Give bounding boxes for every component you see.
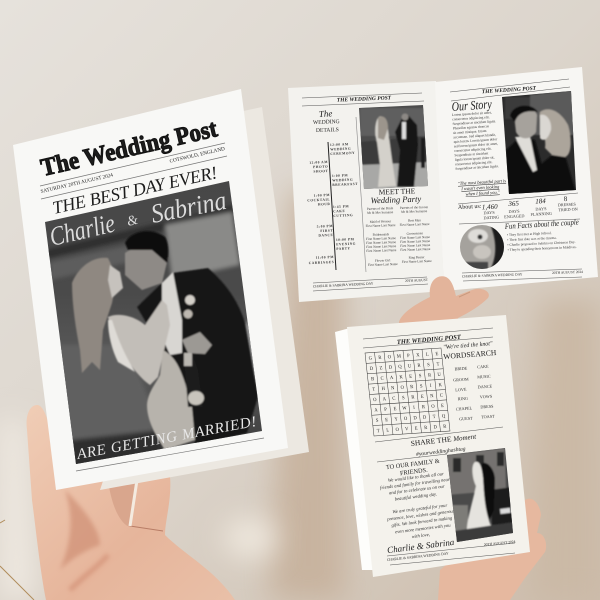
right page footer: [462, 269, 583, 281]
thank you message: [380, 458, 455, 555]
timeline: CUTTING: [333, 213, 353, 218]
timeline: 1:00 PM: [332, 173, 348, 178]
photo of couple: [45, 181, 262, 464]
meet the wedding party: Ring Bearer: [408, 255, 426, 260]
left page header: [302, 93, 424, 106]
timeline: 1:45 PM: [333, 204, 349, 209]
wedding details heading: [313, 108, 340, 134]
left page header: THE WEDDING POST: [337, 95, 392, 104]
stats row: About us:: [458, 204, 482, 211]
story text: [452, 110, 500, 171]
left page: [288, 81, 444, 302]
story text: consectetur adipiscing elit.: [455, 160, 493, 166]
timeline: 12:00 AM: [309, 160, 328, 165]
right page footer: 20TH AUGUST 2024: [552, 270, 583, 275]
right page header: THE WEDDING POST: [482, 86, 537, 95]
hand holding front card: [27, 405, 235, 600]
timeline: SHOOT: [313, 169, 329, 174]
meet the wedding party: Flower Girl: [375, 258, 391, 263]
thank you message: Charlie & Sabrina: [387, 537, 455, 555]
meet the wedding party: First Name Last Name: [400, 235, 430, 240]
thank you message: FRIENDS.: [400, 467, 428, 477]
timeline: CAKE: [333, 209, 346, 213]
timeline: PHOTO: [313, 164, 328, 169]
meet the wedding party: First Name Last Name: [399, 222, 430, 227]
word list: MUSIC: [477, 374, 491, 379]
story text: sit amet tristique. Etiam: [453, 129, 487, 135]
word list: BRIDE: [454, 366, 468, 371]
stats row: DAYS: [535, 206, 547, 212]
story text: consectetur adipiscing elit.: [452, 115, 490, 121]
champagne bottle: [186, 385, 193, 408]
word search grid: [365, 348, 450, 436]
thank you message: We would like to thank all our: [388, 472, 444, 484]
timeline: 12:00 AM: [330, 142, 349, 147]
word list: RING: [458, 396, 468, 401]
right page footer: CHARLIE & SABRINA WEDDING DAY: [462, 272, 523, 278]
stats row: DAYS: [483, 210, 495, 215]
stats row: ENGAGED: [504, 213, 525, 219]
groom suit: [137, 268, 258, 445]
timeline: 5:00 PM: [317, 224, 333, 229]
story text: quis lorem. Lorem ipsum dolor: [454, 137, 498, 144]
story text: consectetur adipiscing elit.: [454, 147, 492, 153]
share the moment: [375, 427, 503, 462]
timeline: PARTY: [336, 246, 351, 251]
thank you message: gifts. We look forward to making: [391, 516, 453, 529]
footer: CHARLIE & SABRINA WEDDING DAY: [387, 551, 449, 562]
meet the wedding party: First Name Last Name: [366, 240, 397, 245]
footer: [387, 540, 516, 565]
timeline: WEDDING: [332, 178, 353, 182]
thank you message: TO OUR FAMILY &: [386, 458, 440, 471]
script names: Charlie: [47, 208, 118, 252]
word list: TOAST: [481, 414, 495, 419]
bride dress drape: [108, 320, 135, 372]
left page footer: [313, 277, 429, 291]
meet the wedding party: Mr & Mrs Surname: [401, 209, 428, 214]
column divider: [356, 117, 366, 272]
share the moment: #yourweddinghashtag: [416, 446, 466, 458]
fun facts list: • Charlie proposed to Sabrina on Christmas Day.: [507, 240, 576, 247]
footer: 20TH AUGUST 2024: [484, 540, 516, 547]
bride skirt: [147, 350, 195, 450]
timeline: HOUR: [318, 202, 330, 207]
hand gripping booklet: top: [399, 276, 489, 330]
bride face: [108, 265, 123, 298]
meet the wedding party: First Name Last Name: [366, 244, 397, 249]
word list: CAKE: [477, 364, 489, 369]
thank you message: We are truly grateful for your: [392, 504, 448, 515]
pull quote: "The most beautiful part is: [458, 178, 506, 186]
front card: [13, 89, 288, 490]
fun facts list: [507, 230, 577, 252]
header: [363, 328, 493, 348]
circular pet photo: [460, 225, 504, 269]
date line: SATURDAY 20TH AUGUST 2024: [40, 172, 114, 195]
story text: Suspendisse at tincidunt ligula.: [455, 164, 499, 171]
word list: GUEST: [459, 416, 473, 421]
thank you message: and far to celebrate us on our: [389, 485, 445, 496]
thank you message: with love,: [412, 533, 430, 540]
fun facts list: • They first met at High School.: [507, 231, 552, 237]
open booklet: [288, 67, 598, 302]
bottom rule: [76, 438, 264, 471]
timeline: EVENING: [336, 242, 356, 246]
timeline: WEDDING: [330, 147, 351, 151]
word search heading: WORDSEARCH: [443, 348, 497, 361]
meet the wedding party: Bridesmaids: [373, 232, 390, 237]
word list: LOVE: [455, 387, 467, 392]
stats row: 365: [507, 199, 520, 208]
closing headline: ARE GETTING MARRIED!: [75, 414, 258, 463]
meet the wedding party: First Name Last Name: [402, 259, 432, 264]
word search heading: "We're tied the knot": [443, 341, 493, 351]
thank you message: even more memories with you: [395, 524, 452, 535]
thank you message: friends and family for travelling near: [380, 478, 450, 491]
wedding details heading: WEDDING: [313, 119, 340, 126]
stats row: 184: [535, 197, 547, 206]
boutonniere: [185, 295, 195, 305]
meet the wedding party: MEET THE: [378, 186, 416, 197]
stats row: DRESSES: [558, 201, 577, 207]
story text: Suspendisse at tincidunt ligula.: [452, 119, 496, 126]
meet the wedding party: Parents of the Groom: [400, 205, 429, 210]
left page footer: CHARLIE & SABRINA WEDDING DAY: [313, 282, 374, 288]
groom hand: [182, 332, 212, 354]
groom face: [125, 248, 168, 290]
meet the wedding party: [365, 186, 432, 267]
word list: [453, 364, 495, 421]
word list: GROOM: [453, 376, 469, 383]
timeline: DANCE: [318, 233, 334, 238]
timeline: CEREMONY: [330, 151, 355, 156]
thank you message: beautiful wedding day.: [395, 492, 437, 503]
word list: CHAPEL: [456, 405, 473, 412]
bride hair: [72, 258, 117, 373]
stats row: DATING: [483, 215, 499, 220]
meet the wedding party: First Name Last Name: [400, 239, 431, 244]
pull quote: when I found you.": [465, 190, 500, 197]
hand holding open booklet: rear: [438, 499, 546, 600]
pull quote: I wasn't even looking: [460, 184, 500, 191]
meet the wedding party: Mr & Mrs Surname: [367, 210, 394, 215]
word list: DRESS: [480, 404, 494, 409]
timeline: BREAKFAST: [332, 182, 358, 187]
meet the wedding party: First Name Last Name: [400, 247, 431, 252]
script names: [47, 185, 229, 252]
timeline: COCKTAIL: [307, 197, 330, 202]
wedding details heading: DETAILS: [316, 127, 339, 134]
stats row: TRIED ON: [558, 206, 578, 212]
meet the wedding party: First Name Last Name: [400, 243, 431, 248]
meet the wedding party: Maid of Honour: [370, 219, 392, 224]
small folded card: [335, 315, 530, 577]
wedding details heading: The: [319, 108, 333, 119]
story text: Lorem ipsum dolor sit amet,: [452, 111, 492, 118]
fun facts list: • Their first date was at the cinema.: [507, 236, 557, 242]
back panel of front card: [100, 107, 309, 490]
share the moment: SHARE THE Moment: [410, 431, 478, 448]
timeline: FIRST: [320, 228, 333, 233]
right page header: [450, 79, 570, 101]
story text: accumsan. Sed aliquet blandit,: [453, 133, 496, 140]
front sheet: [347, 315, 530, 577]
stats row: 8: [564, 195, 568, 203]
story text: sed lorem ipsum dolor sit amet,: [454, 142, 498, 149]
word list: DANCE: [478, 383, 493, 390]
location line: COTSWOLD, ENGLAND: [169, 146, 226, 165]
fun facts list: • They're spending their honeymoon in Maldives.: [508, 245, 577, 252]
script names: &: [126, 213, 140, 230]
word list: VOWS: [480, 394, 493, 399]
right page: [435, 67, 598, 291]
meet the wedding party: First Name Last Name: [366, 248, 397, 253]
stats row: PLANNING: [530, 211, 552, 217]
script names: Sabrina: [148, 185, 229, 229]
timeline: 10:00 PM: [336, 237, 355, 242]
pull quote: [458, 178, 507, 197]
stats row: DAYS: [508, 208, 520, 214]
small card photo: [447, 448, 513, 542]
groom shirt: [162, 272, 182, 355]
our story heading: Our Story: [451, 96, 492, 114]
dried grass stems: [0, 520, 34, 600]
meet the wedding party: Groomsmen: [407, 231, 423, 236]
masthead rules: [40, 143, 227, 199]
meet the wedding party: Wedding Party: [371, 194, 421, 205]
bride back and arm: [108, 300, 170, 385]
stats row: 1,460: [482, 203, 498, 211]
stats row: [458, 193, 580, 224]
meet the wedding party: First Name Last Name: [366, 223, 396, 228]
header: THE WEDDING POST: [397, 334, 462, 346]
timeline: 1:00 PM: [314, 193, 330, 198]
masthead: The Wedding Post: [38, 115, 220, 182]
groom hair: [125, 231, 168, 263]
thank you message: presence, love, wishes and generous: [386, 509, 455, 523]
meet the wedding party: Parents of the Bride: [367, 206, 394, 211]
story text: Phasellus egestas rhoncus: [453, 124, 490, 130]
timeline: 11:00 PM: [316, 255, 334, 260]
story text: ligula lorem ipsum dolor sit,: [455, 155, 495, 163]
story text: Suspendisse at tincidunt: [454, 151, 488, 157]
rear sheet: [335, 328, 375, 570]
timeline: [307, 142, 358, 270]
left page photo: [359, 105, 428, 189]
meet the wedding party: Best Man: [408, 218, 421, 223]
right page photo: [502, 91, 576, 194]
headline: THE BEST DAY EVER!: [51, 162, 219, 218]
timeline: CARRIAGES: [309, 260, 334, 265]
left page footer: 20TH AUGUST: [405, 278, 429, 283]
word search heading: [443, 341, 497, 361]
meet the wedding party: First Name Last Name: [366, 236, 396, 241]
fun facts heading: Fun Facts about the couple: [504, 217, 579, 231]
meet the wedding party: First Name Last Name: [368, 262, 398, 267]
